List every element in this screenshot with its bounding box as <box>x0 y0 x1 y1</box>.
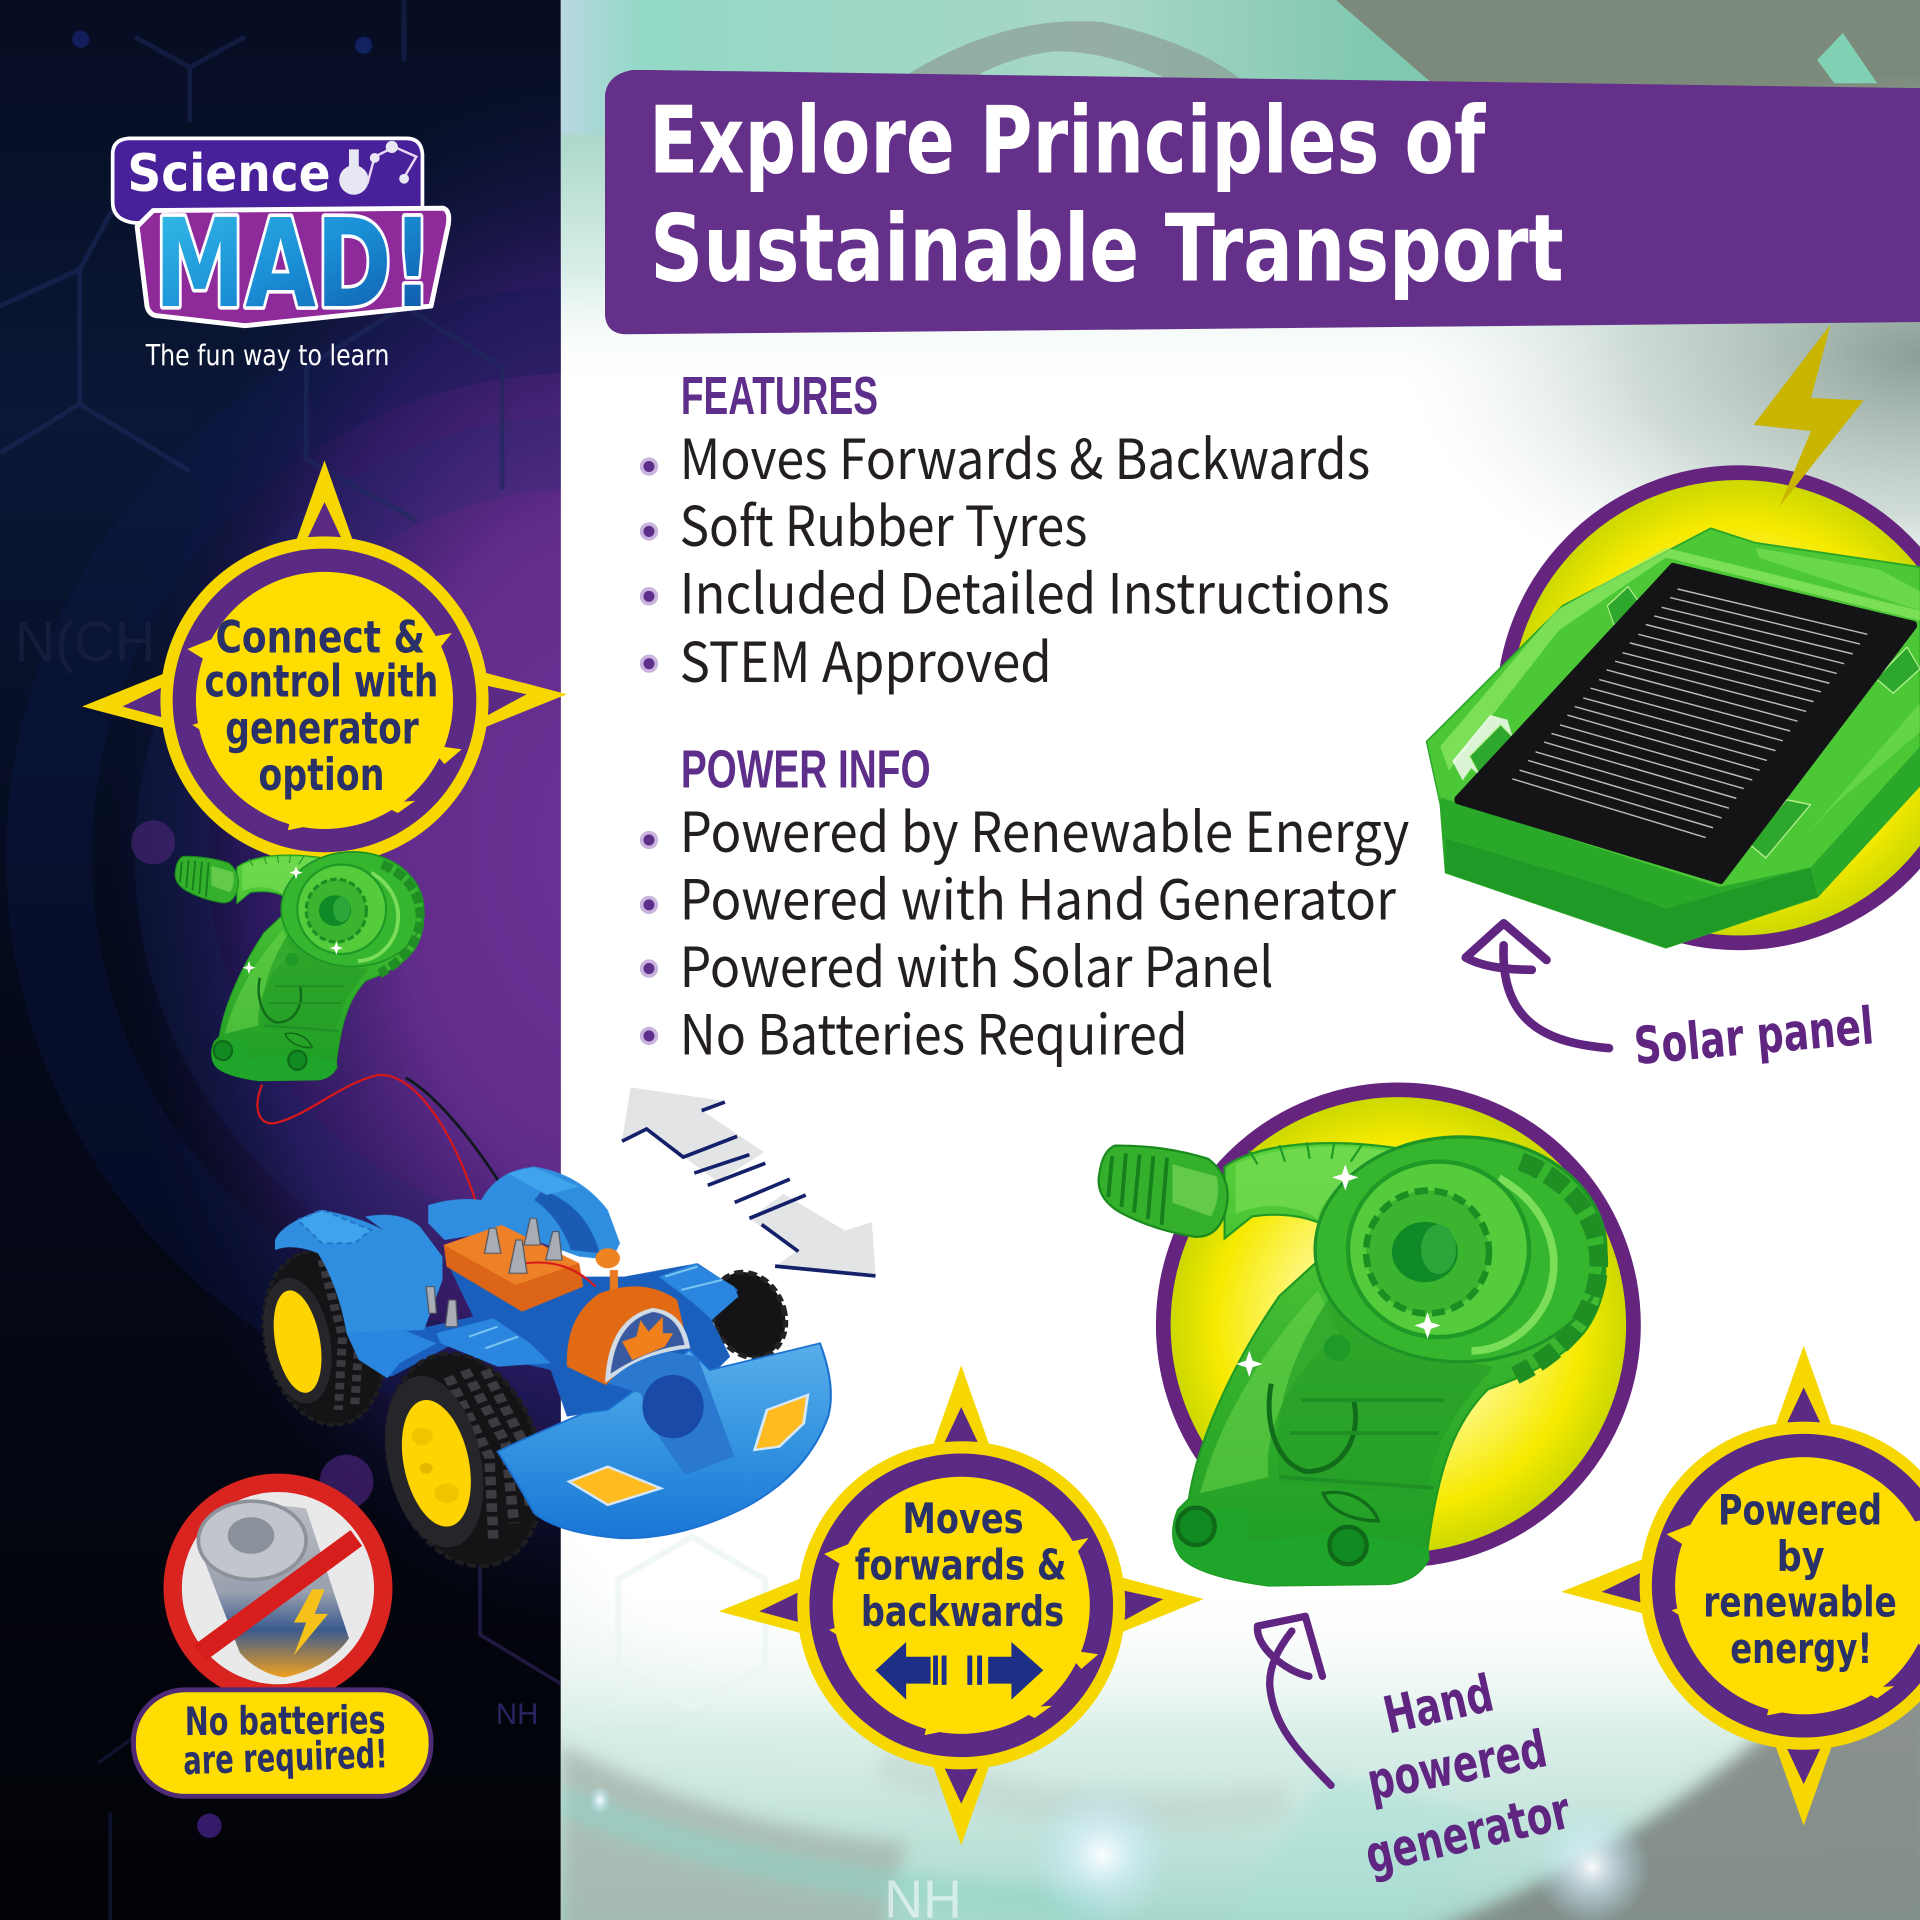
background: left dark purple panel <box>0 0 789 1920</box>
orange dome and starburst <box>567 1248 687 1385</box>
features text: Moves Forwards & Backwards <box>680 415 1370 495</box>
badge: powered by renewable energy: by <box>1777 1532 1824 1581</box>
badge: connect and control: option <box>258 750 384 801</box>
arrow to hand generator <box>1257 1616 1331 1785</box>
generator <box>1099 1137 1606 1586</box>
hand powered generator label: Hand <box>1378 1664 1499 1747</box>
no batteries pill <box>133 1690 431 1796</box>
background: left dark purple panel: NH <box>496 1698 538 1731</box>
orange control box <box>426 1218 596 1327</box>
background: right white panel <box>561 0 1920 1920</box>
cockpit <box>608 1352 734 1475</box>
solar cell lines <box>1512 589 1867 838</box>
features text <box>680 415 1390 698</box>
badge: connect and control <box>82 460 567 940</box>
badge: moves forwards and backwards: forwards & <box>855 1541 1067 1590</box>
no batteries pill: No batteries <box>185 1698 386 1745</box>
far right wheel <box>702 1266 795 1363</box>
logo science word: Science <box>127 144 331 204</box>
logo: Science MAD!: MAD! <box>154 192 433 335</box>
prohibited battery icon <box>173 1483 383 1693</box>
small hand generator <box>175 852 424 1081</box>
power text: Powered by Renewable Energy <box>680 788 1409 868</box>
features text: Included Detailed Instructions <box>680 549 1390 629</box>
features text: STEM Approved <box>680 618 1052 698</box>
background: left dark purple panel: N(CH <box>15 610 155 673</box>
title text: Explore Principles of <box>649 87 1486 195</box>
solar frame <box>1427 528 1920 948</box>
arrow to solar panel <box>1466 923 1609 1048</box>
logo top plate <box>113 138 422 223</box>
large hand generator illustration <box>1099 1090 1633 1586</box>
bottom bands <box>560 1702 1920 1920</box>
generator circle <box>1163 1090 1633 1560</box>
title text: Sustainable Transport <box>650 194 1564 302</box>
badge: powered by renewable energy: energy! <box>1730 1624 1872 1673</box>
badge: connect and control: control with <box>204 657 438 708</box>
no batteries sign <box>133 1483 431 1796</box>
power text <box>680 788 1409 1070</box>
double arrow icon <box>876 1642 1043 1700</box>
fade below top band <box>561 134 1544 336</box>
lightning bolt <box>1753 324 1864 507</box>
logo: Science MAD! <box>113 138 449 372</box>
features text: Soft Rubber Tyres <box>680 482 1087 562</box>
power info list <box>642 739 1409 1070</box>
rear left wheel <box>251 1245 398 1431</box>
yellow circle <box>1504 473 1920 943</box>
car chassis <box>347 1257 738 1417</box>
badge: moves forwards and backwards: Moves <box>902 1494 1024 1543</box>
car <box>251 1167 831 1576</box>
power text: No Batteries Required <box>680 990 1188 1070</box>
title text <box>649 87 1564 302</box>
badge: connect and control: generator <box>225 703 419 754</box>
top gray wedge <box>1336 0 1920 88</box>
badge: moves forwards and backwards: backwards <box>861 1587 1064 1636</box>
features list <box>642 366 1390 698</box>
features bullets <box>642 459 656 671</box>
rear fender <box>275 1210 442 1333</box>
logo mad word <box>137 208 449 326</box>
gray haze under banner <box>1473 322 1920 546</box>
car wires <box>257 1075 529 1236</box>
power info heading: POWER INFO <box>681 739 931 799</box>
power text: Powered with Solar Panel <box>680 923 1273 1003</box>
logo tagline: The fun way to learn <box>145 339 389 372</box>
solar panel illustration <box>1427 324 1920 948</box>
motion direction arrows <box>622 1087 876 1276</box>
front wheel <box>368 1344 562 1576</box>
logo flask icon <box>339 141 416 195</box>
features heading: FEATURES <box>681 366 878 426</box>
hand powered generator label: powered <box>1362 1719 1552 1813</box>
badge: moves forwards and backwards <box>719 1365 1204 1845</box>
power text: Powered with Hand Generator <box>680 856 1396 936</box>
hand powered generator label: generator <box>1360 1781 1576 1886</box>
title banner <box>605 70 1920 334</box>
bottom haze <box>561 1652 1780 1920</box>
hand powered generator label <box>1360 1664 1576 1886</box>
badge: connect and control: Connect & <box>216 613 425 664</box>
power bullets <box>642 833 656 1043</box>
headlights <box>569 1395 808 1505</box>
badge: powered by renewable energy <box>1561 1346 1920 1826</box>
no batteries pill: are required! <box>182 1732 388 1784</box>
badge: powered by renewable energy: Powered <box>1718 1485 1882 1534</box>
second fender <box>428 1167 620 1260</box>
top teal band <box>561 0 1430 134</box>
front bumper <box>498 1343 831 1538</box>
side fins <box>347 1263 738 1378</box>
